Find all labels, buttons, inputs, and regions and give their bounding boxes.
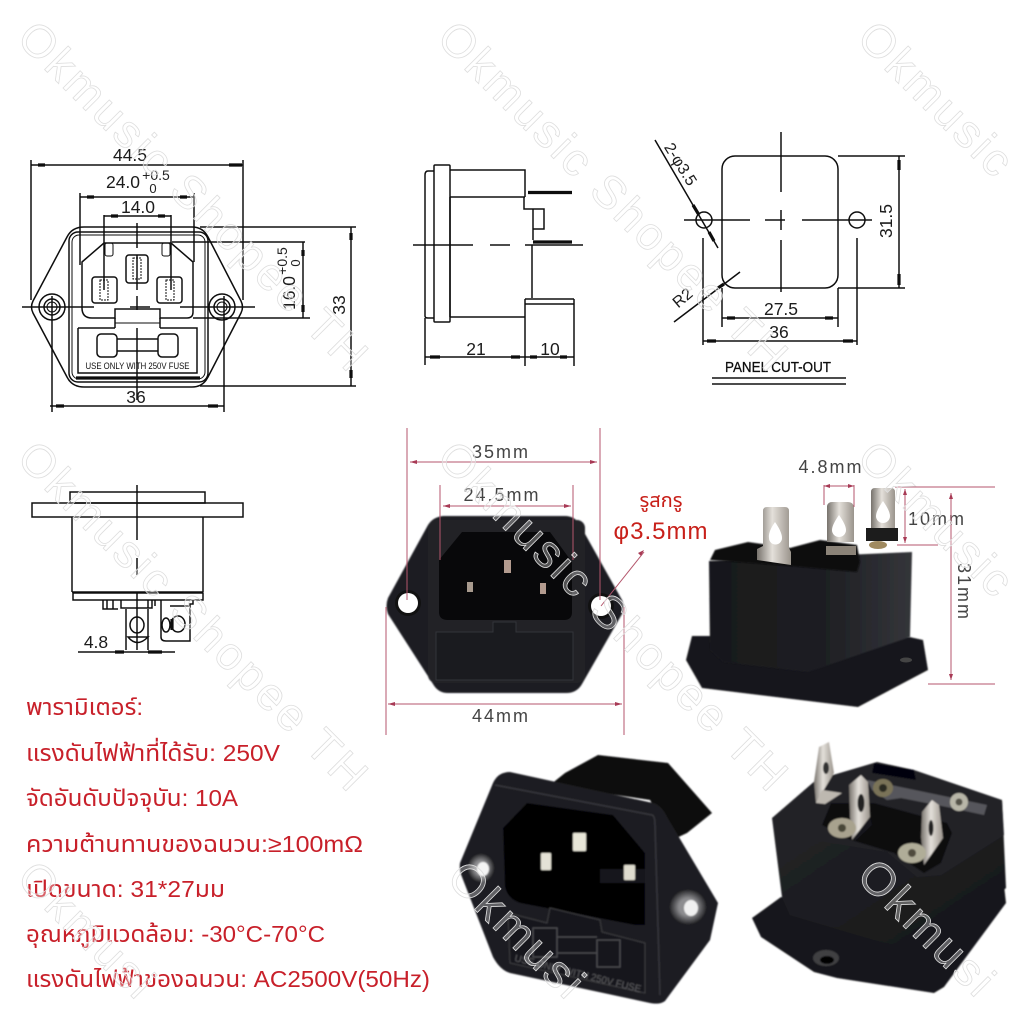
flange — [752, 885, 1006, 993]
panel cut-out title — [712, 359, 846, 384]
fuse symbol — [97, 334, 178, 357]
back housing — [550, 755, 712, 840]
hole callout: φ3.5mm — [614, 518, 708, 545]
dimension 24.5mm — [440, 485, 573, 560]
dimension 4.8mm: 4.8mm — [798, 457, 864, 477]
pins — [467, 560, 546, 594]
technical drawing: side view with dimensions — [413, 165, 583, 366]
dimension 4.8mm — [798, 457, 864, 507]
cut-out outline — [722, 156, 838, 288]
dimension 2-phi3.5: 2-φ3.5 — [660, 140, 699, 189]
fuse door — [508, 908, 645, 993]
dimension 4.8 — [78, 632, 175, 652]
photo: socket rear, angled — [752, 742, 1006, 993]
dimension 31.5 — [838, 156, 905, 288]
top block — [872, 763, 916, 780]
opening size: เปิดขนาด: 31*27มม — [26, 876, 225, 902]
center lines — [684, 132, 872, 292]
insulation voltage: แรงดันไฟฟ้าของฉนวน: AC2500V(50Hz) — [26, 966, 430, 992]
dimension 16.0 — [172, 242, 310, 318]
photo: front of socket with dimensions — [386, 428, 708, 735]
flange and body — [32, 492, 243, 600]
socket front outline — [32, 227, 242, 387]
watermark repeated diagonally: Okmusic Shopee TH — [8, 430, 380, 803]
technical drawing: bottom view — [32, 485, 243, 652]
dimension 10mm: 10mm — [908, 509, 966, 529]
dimension 14.0: 14.0 — [121, 197, 155, 217]
dimension 10mm — [895, 487, 995, 545]
watermark repeated diagonally: Okmusic Shopee TH — [428, 10, 800, 383]
dimension 21 — [425, 318, 525, 365]
body front — [772, 800, 1006, 957]
pins — [541, 833, 635, 880]
fuse door — [436, 622, 573, 680]
dimension 24.5mm: 24.5mm — [463, 485, 541, 505]
technical drawing: front view with dimensions — [22, 145, 356, 412]
dimension 27.5: 27.5 — [764, 299, 798, 319]
watermark repeated diagonally: Okmusic — [848, 430, 1024, 608]
dimension 24.0 — [80, 167, 194, 265]
dimension 31mm: 31mm — [954, 563, 974, 621]
dimension 16.0: +0.5 — [274, 247, 290, 275]
technical drawing: panel cut-out — [655, 132, 905, 384]
terminals — [757, 488, 898, 565]
dimension 21: 21 — [466, 339, 486, 359]
inner bar — [600, 869, 645, 883]
screw plate — [867, 780, 987, 815]
dimension 33: 33 — [329, 295, 349, 315]
dimension 35mm — [407, 428, 600, 600]
dimension 35mm: 35mm — [472, 442, 530, 462]
rated voltage: แรงดันไฟฟ้าที่ได้รับ: 250V — [26, 737, 281, 766]
socket pins — [92, 243, 182, 303]
flange — [686, 636, 928, 707]
mounting holes — [39, 294, 235, 320]
fuse symbol — [533, 928, 620, 967]
dimension 24.0: +0.5 — [142, 167, 170, 183]
dimension 24.0: 0 — [149, 181, 157, 196]
dimension 10 — [525, 339, 574, 359]
side view body — [425, 165, 574, 366]
fuse label: USE ONLY WITH 250V FUSE — [86, 361, 190, 371]
panel cut-out title: PANEL CUT-OUT — [725, 359, 831, 376]
dimension R2 — [670, 272, 740, 322]
ambient temperature: อุณหภูมิแวดล้อม: -30°C-70°C — [26, 921, 325, 949]
heading: พารามิเตอร์: — [26, 694, 143, 720]
watermark repeated diagonally: Okmusi — [848, 848, 1008, 1008]
watermark repeated diagonally: Okmusic Shopee TH — [8, 10, 380, 383]
terminals and screws — [814, 742, 968, 865]
dimension 36 — [703, 238, 857, 345]
terminals — [103, 600, 193, 650]
insulation resistance: ความต้านทานของฉนวน:≥100mΩ — [26, 831, 363, 857]
center lines — [22, 223, 255, 412]
dimension R2: R2 — [670, 285, 696, 312]
dimension 31.5: 31.5 — [876, 204, 896, 238]
socket recess — [439, 532, 572, 620]
dimension 16.0: 16.0 — [279, 276, 299, 310]
top block — [710, 540, 860, 572]
flange hole — [813, 950, 839, 966]
dimension 33 — [200, 227, 356, 386]
faceplate — [460, 772, 718, 1004]
dimension 16.0: 0 — [288, 259, 303, 267]
rated current: จัดอันดับปัจจุบัน: 10A — [26, 785, 239, 812]
dimension 44mm: 44mm — [472, 706, 530, 726]
watermark repeated diagonally: Okmusi — [8, 850, 168, 1010]
top face — [772, 762, 1004, 877]
center line — [136, 485, 138, 650]
dimension 14.0 — [104, 197, 171, 290]
fuse label: USE ONLY WITH 250V FUSE — [513, 953, 642, 995]
mounting holes — [468, 854, 706, 924]
dimension 24.0: 24.0 — [106, 172, 140, 192]
watermark repeated diagonally: Okmusic — [848, 10, 1024, 188]
hole callout: รูสกรู — [640, 490, 682, 513]
dimension 27.5 — [722, 288, 838, 327]
photo: socket front, angled — [460, 755, 718, 1004]
dimension 44.5 — [31, 145, 243, 300]
watermark repeated diagonally: Okmusic Shopee TH — [428, 430, 800, 803]
dimension 36: 36 — [126, 387, 146, 407]
photo: rear of socket with dimensions — [686, 457, 995, 707]
mounting holes — [696, 212, 865, 228]
dimension 10: 10 — [540, 339, 560, 359]
dimension 44mm — [386, 607, 624, 735]
dimension 36: 36 — [769, 322, 789, 342]
frame highlight — [495, 785, 660, 995]
center line — [413, 244, 583, 246]
hole callout — [601, 490, 708, 606]
dimension 4.8: 4.8 — [84, 632, 108, 652]
flange hole — [900, 658, 912, 662]
dimension 2-phi3.5 — [655, 140, 718, 248]
mounting holes — [395, 590, 614, 619]
socket faceplate — [386, 516, 624, 693]
parameters text block — [26, 694, 430, 992]
watermark repeated diagonally: Okmusi — [438, 850, 598, 1010]
recess — [822, 803, 952, 873]
socket recess — [503, 803, 645, 925]
dimension 44.5: 44.5 — [113, 145, 147, 165]
body — [709, 552, 912, 672]
dimension 31mm — [928, 493, 995, 684]
